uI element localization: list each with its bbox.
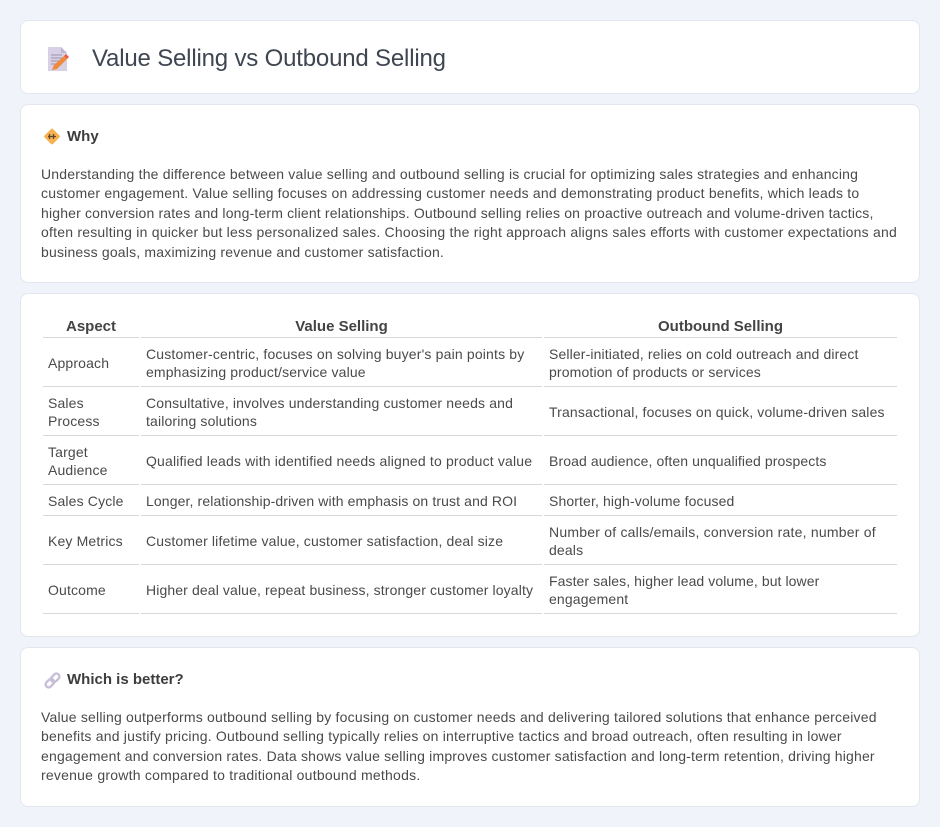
row: key metrics: Number of calls/emails, conversion rate, number of <box>549 524 876 540</box>
row: outcome: Outcome <box>48 582 106 598</box>
text block: which is better: Value selling outperforms outbound selling by focusing on customer needs and delivering tailored solutions that enhance perceived <box>41 709 877 725</box>
text block: which is better: revenue growth compared to traditional outbound methods. <box>41 767 420 783</box>
text block: which is better: engagement and conversion rates. Data shows value selling improves customer satisfaction and long-term retention, driving higher <box>41 748 875 764</box>
row: sales cycle: Sales Cycle <box>48 493 124 509</box>
row: key metrics: Key Metrics <box>48 533 123 549</box>
row: approach: promotion of products or services <box>549 364 761 380</box>
heading: why: Why <box>67 128 99 145</box>
row: approach: Approach <box>48 355 109 371</box>
text block: why: customer engagement. Value selling focuses on addressing customer needs and demonstrating product benefits, which leads to <box>41 185 859 201</box>
row: sales process: tailoring solutions <box>146 413 257 429</box>
row: key metrics <box>48 524 876 558</box>
text block: why: business goals, maximizing revenue and customer satisfaction. <box>41 244 444 260</box>
row: target audience: Broad audience, often unqualified prospects <box>549 453 826 469</box>
row: key metrics: Customer lifetime value, customer satisfaction, deal size <box>146 533 503 549</box>
icon: warning diamond <box>44 128 60 144</box>
table header: Aspect <box>66 318 116 335</box>
text block: why: often resulting in quicker but less personalized sales. Choosing the right approach aligns sales efforts with customer expectations and <box>41 224 897 240</box>
row: approach <box>48 346 858 380</box>
row: sales cycle: Shorter, high-volume focused <box>549 493 734 509</box>
row: sales cycle: Longer, relationship-driven with emphasis on trust and ROI <box>146 493 517 509</box>
row: sales process: Consultative, involves understanding customer needs and <box>146 395 513 411</box>
row: sales process <box>48 395 885 429</box>
row: sales process: Process <box>48 413 100 429</box>
icon: document with pencil <box>48 47 69 71</box>
text block: why <box>41 166 897 260</box>
panel: why <box>20 104 920 283</box>
row: key metrics: deals <box>549 542 583 558</box>
text block: why: higher conversion rates and long-term client relationships. Outbound selling relies on proactive outreach and volume-driven tactics, <box>41 205 874 221</box>
row: outcome: Faster sales, higher lead volume, but lower <box>549 573 819 589</box>
text block: which is better <box>41 709 877 783</box>
row: target audience: Target <box>48 444 88 460</box>
text block: which is better: benefits and justify pricing. Outbound selling typically relies on interruptive tactics and broad outreach, often resulting in lower <box>41 728 842 744</box>
row: approach: Seller-initiated, relies on cold outreach and direct <box>549 346 858 362</box>
title: Value Selling vs Outbound Selling <box>92 45 446 72</box>
row: target audience: Audience <box>48 462 108 478</box>
table header: Outbound Selling <box>658 318 783 335</box>
heading: which is better: Which is better? <box>67 671 184 688</box>
table header <box>66 318 783 335</box>
panel: header <box>20 20 920 94</box>
panel: comparison table <box>20 293 920 637</box>
row: target audience <box>48 444 826 478</box>
row: sales cycle <box>48 493 734 509</box>
row: outcome: engagement <box>549 591 628 607</box>
row: sales process: Sales <box>48 395 84 411</box>
row: approach: Customer-centric, focuses on solving buyer's pain points by <box>146 346 524 362</box>
panel: which is better <box>20 647 920 807</box>
row: target audience: Qualified leads with identified needs aligned to product value <box>146 453 532 469</box>
row: sales process: Transactional, focuses on quick, volume-driven sales <box>549 404 885 420</box>
row: outcome <box>48 573 820 607</box>
table header: Value Selling <box>295 318 388 335</box>
row: approach: emphasizing product/service value <box>146 364 366 380</box>
row: outcome: Higher deal value, repeat business, stronger customer loyalty <box>146 582 533 598</box>
icon: link <box>44 672 60 689</box>
text block: why: Understanding the difference between value selling and outbound selling is crucial for optimizing sales strategies and enhancing <box>41 166 858 182</box>
